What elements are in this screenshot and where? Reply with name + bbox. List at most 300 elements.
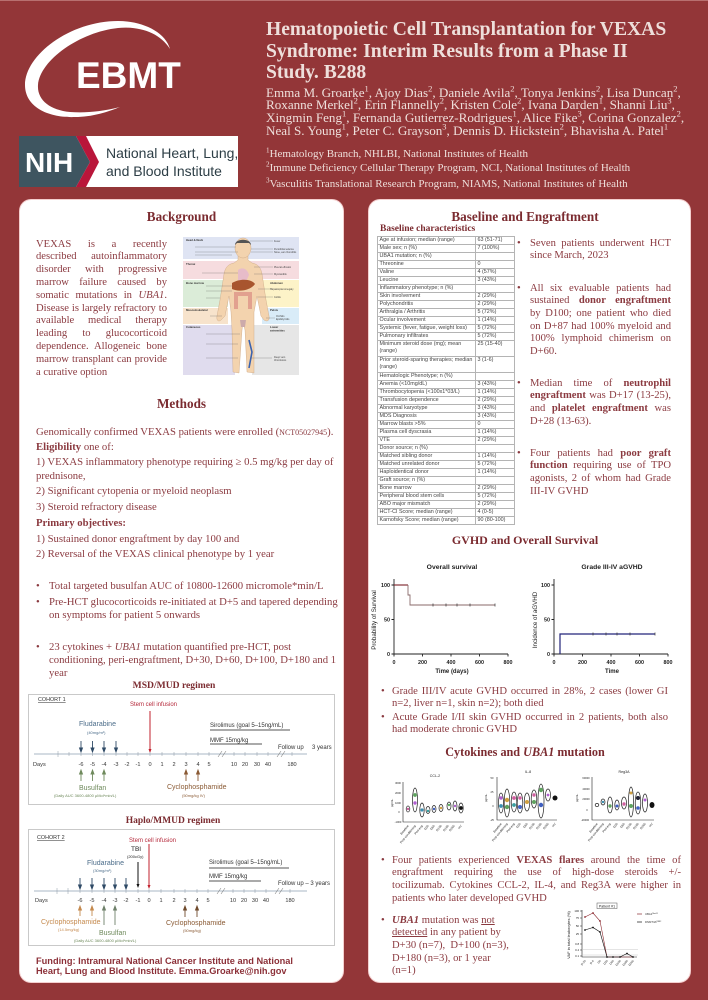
table: baseline characteristics: Thrombocytopenia (<100x1*03/L) bbox=[380, 389, 460, 395]
diagram: cohort 2 timeline: 2 bbox=[172, 898, 176, 904]
chart: UBA1 VAF over time, patient 1: D-20 bbox=[580, 959, 587, 966]
diagram: cohort 2 timeline: (14.5mg/kg) bbox=[58, 927, 80, 932]
diagram: cohort 1 timeline: Cyclophosphamide bbox=[167, 784, 227, 791]
authors: Neal S. Young1, Peter C. Grayson3, Dennis D. Hickstein2, Bhavisha A. Patel1 bbox=[266, 121, 668, 138]
bullet: UBA1 mutation not detected: detected in any patient by bbox=[392, 927, 501, 938]
bullet: donor engraftment bbox=[517, 283, 671, 357]
figure: VEXAS clinical manifestations anatomy: Myocarditis bbox=[274, 273, 287, 276]
chart: grade III-IV aGVHD incidence: 50 bbox=[544, 618, 550, 624]
bullet: VEXAS flares: Four patients experienced VEXAS flares around the time of bbox=[392, 855, 681, 866]
diagram: cohort 2 timeline: MMF 15mg/kg bbox=[209, 874, 247, 880]
heading: Methods: Methods bbox=[157, 396, 206, 411]
table: baseline characteristics: Prior steroid-sparing therapies; median bbox=[380, 357, 472, 363]
diagram: cohort 2 timeline: Stem cell infusion bbox=[129, 838, 176, 844]
figure: VEXAS clinical manifestations anatomy: Colitis bbox=[274, 296, 282, 299]
table: baseline characteristics: 3 (43%) bbox=[478, 381, 496, 387]
diagram: cohort 1 timeline: Stem cell infusion bbox=[130, 702, 177, 708]
diagram: cohort 2 timeline: -6 bbox=[78, 898, 82, 904]
diagram: cohort 2 timeline: (200cGy) bbox=[127, 854, 144, 859]
chart: UBA1 VAF over time, patient 1: D180 bbox=[621, 959, 629, 967]
table: baseline characteristics: 5 (72%) bbox=[478, 309, 496, 315]
table: baseline characteristics: Threonine bbox=[380, 261, 404, 267]
diagram: cohort 1 timeline: 180 bbox=[287, 762, 297, 768]
figure: VEXAS clinical manifestations anatomy: Thorax bbox=[186, 262, 196, 266]
affiliations: 2Immune Deficiency Cellular Therapy Program, NCI, National Institutes of Health bbox=[266, 160, 630, 174]
chart: grade III-IV aGVHD incidence: 400 bbox=[606, 660, 616, 666]
bullet: acute skin GVHD: had moderate chronic GVHD bbox=[392, 724, 517, 735]
chart: CCL-2 bbox=[390, 774, 464, 844]
authors: Roxanne Merkel2, Erin Flannelly2, Kristen Cole2, Ivana Darden1, Shanni Liu3, bbox=[266, 96, 675, 112]
table: baseline characteristics: 25 (15-40) bbox=[478, 341, 502, 347]
chart: grade III-IV aGVHD incidence: 0 bbox=[547, 652, 550, 658]
chart: IL-8: Post-conditioning bbox=[491, 822, 509, 842]
figure: VEXAS clinical manifestations anatomy: Musculoskeletal bbox=[186, 308, 208, 312]
table: baseline characteristics: Transfusion dependence bbox=[380, 397, 439, 403]
table: baseline characteristics: ABO major mismatch bbox=[380, 501, 430, 507]
diagram: cohort 2 timeline: 1 bbox=[159, 898, 163, 904]
bullet: VEXAS flares: patients who later developed GVHD bbox=[392, 893, 547, 904]
table: baseline characteristics: Plasma cell dyscrasia bbox=[380, 429, 431, 435]
table: baseline characteristics: Polychondritis bbox=[380, 301, 413, 307]
header band bbox=[0, 0, 708, 197]
title: Study. B288 bbox=[266, 62, 366, 83]
chart: Reg3A bbox=[575, 770, 654, 842]
chart: UBA1 VAF over time, patient 1: R882 bbox=[656, 921, 662, 923]
bullet: poor graft function: agonists, 2 of whom had Grade bbox=[530, 473, 671, 484]
text: eligibility and primary objectives: Genomically confirmed VEXAS patients were enrolled (NCT05027945). bbox=[36, 426, 333, 438]
bullet: VEXAS flares bbox=[381, 855, 682, 904]
diagram: cohort 2 timeline: 0 bbox=[147, 898, 151, 904]
diagram: cohort 1 timeline bbox=[28, 694, 335, 805]
diagram: cohort 2 timeline: -2 bbox=[124, 898, 128, 904]
chart: IL-8: Peri-eng bbox=[505, 822, 516, 833]
table: baseline characteristics: Leucine bbox=[380, 277, 398, 283]
bullet: donor engraftment: on D+87 had 100% myeloid and bbox=[530, 321, 671, 332]
diagram: cohort 2 timeline: Fludarabine bbox=[87, 860, 124, 867]
chart: IL-8: D30 bbox=[515, 822, 522, 829]
chart: IL-8: HV bbox=[551, 822, 557, 828]
text: background paragraph: disorder with progressive bbox=[36, 264, 167, 275]
table: baseline characteristics: Anemia (<10mg/dL) bbox=[380, 381, 427, 387]
diagram: cohort 1 timeline: COHORT 1 bbox=[38, 697, 66, 703]
diagram: cohort 1 timeline: -2 bbox=[125, 762, 129, 768]
chart: overall survival: 0 bbox=[392, 660, 396, 666]
chart: grade III-IV aGVHD incidence: 100 bbox=[541, 583, 550, 589]
text: background paragraph: described autoinflammatory bbox=[36, 251, 167, 262]
diagram: cohort 2 timeline: 20 bbox=[241, 898, 247, 904]
table: baseline characteristics: Graft source; n (%) bbox=[380, 477, 425, 483]
bullets: cytokines and UBA1 quantification: conditioning, peri-engraftment, D+30, D+60, D+100, D+180 and 1 bbox=[49, 654, 336, 666]
logo: NIH National Heart, Lung, and Blood Institute: and Blood Institute bbox=[106, 163, 222, 179]
chart: CCL-2: D60 bbox=[429, 824, 436, 831]
chart: CCL-2: D30 bbox=[423, 824, 430, 831]
heading: Background: Background bbox=[147, 209, 216, 224]
diagram: cohort 1 timeline: -5 bbox=[90, 762, 95, 768]
chart: IL-8: pg/mL bbox=[484, 794, 488, 802]
chart: UBA1 VAF over time, patient 1: 0.4 bbox=[575, 948, 579, 952]
figure: VEXAS clinical manifestations anatomy: Orchitis bbox=[276, 315, 285, 318]
chart: Reg3A: D60 bbox=[619, 822, 626, 829]
authors: Xingmin Feng1, Fernanda Gutierrez-Rodrigues1, Alice Fike3, Corina Gonzalez2, bbox=[266, 109, 684, 125]
bullets: conditioning and steroids: • bbox=[36, 580, 40, 592]
heading: MSD/MUD regimen: MSD/MUD regimen bbox=[133, 680, 215, 691]
table: baseline characteristics: Arthralgia / Arthritis bbox=[380, 309, 425, 315]
bullets: conditioning and steroids bbox=[36, 580, 338, 621]
table: baseline characteristics: Marrow blasts >5% bbox=[380, 421, 426, 427]
chart: Reg3A: HV bbox=[648, 822, 654, 828]
table: baseline characteristics: Matched unrelated donor bbox=[380, 461, 439, 467]
chart: CCL-2: 1000 bbox=[395, 801, 401, 805]
chart: UBA1 VAF over time, patient 1: Patient #1 bbox=[599, 904, 615, 908]
diagram: cohort 1 timeline: 4 bbox=[196, 762, 200, 768]
diagram: cohort 2 timeline: Cyclophosphamide bbox=[41, 919, 101, 926]
bullet: poor graft function: function requiring use of TPO bbox=[530, 460, 671, 471]
bullet: poor graft function: • bbox=[517, 448, 521, 459]
diagram: cohort 1 timeline: Follow up bbox=[278, 745, 304, 751]
diagram: cohort 1 timeline: Sirolimus (goal 5–15ng/mL) bbox=[210, 723, 283, 729]
text: eligibility and primary objectives: 1) VEXAS inflammatory phenotype requiring ≥ 0.5 mg/kg per day of bbox=[36, 456, 333, 468]
chart: overall survival: Probability of Survival bbox=[371, 590, 378, 650]
chart: UBA1 VAF over time, patient 1: 0.8 bbox=[575, 942, 579, 946]
chart: IL-8: 25 bbox=[491, 790, 494, 794]
heading: Baseline characteristics: Baseline characteristics bbox=[380, 224, 475, 234]
bullet: acute GVHD grade III/IV: • bbox=[381, 686, 385, 697]
logo: NIH National Heart, Lung, and Blood Institute: National Heart, Lung, bbox=[106, 145, 238, 161]
authors bbox=[266, 83, 684, 138]
chart: overall survival: Overall survival bbox=[427, 564, 477, 571]
bullet: acute GVHD grade III/IV: Grade III/IV acute GVHD occurred in 28%, 2 cases (lower GI bbox=[392, 686, 668, 697]
chart: CCL-2: Post-conditioning bbox=[399, 824, 417, 844]
figure: VEXAS clinical manifestations anatomy: Bone marrow bbox=[186, 281, 205, 285]
figure: VEXAS clinical manifestations anatomy: Cutaneous bbox=[186, 325, 201, 329]
funding statement: Funding: Intramural National Cancer Institute and National bbox=[36, 956, 293, 966]
bullet: donor engraftment: All six evaluable patients had bbox=[530, 283, 671, 294]
bullet: acute GVHD grade III/IV bbox=[381, 686, 668, 709]
diagram: cohort 1 timeline: Busulfan bbox=[79, 785, 106, 792]
chart: Reg3A: 20000 bbox=[582, 797, 590, 801]
chart: grade III-IV aGVHD incidence: Grade III-IV aGVHD bbox=[581, 564, 643, 571]
figure: VEXAS clinical manifestations anatomy: Epididymitis bbox=[276, 318, 290, 321]
table: baseline characteristics: Minimum steroid dose (mg); mean bbox=[380, 341, 461, 347]
diagram: cohort 1 timeline: (50mg/kg IV) bbox=[182, 793, 206, 798]
table: baseline characteristics: (range) bbox=[380, 364, 397, 370]
chart: overall survival: 400 bbox=[446, 660, 456, 666]
text: background paragraph: dependence. Allogeneic bone bbox=[36, 341, 167, 352]
figure: VEXAS clinical manifestations anatomy: Deep vein bbox=[274, 356, 286, 359]
diagram: cohort 1 timeline: 10 bbox=[231, 762, 237, 768]
table: baseline characteristics: Age at infusion; median (range) bbox=[380, 237, 455, 243]
chart: CCL-2: 0 bbox=[398, 810, 400, 814]
text: background paragraph: marrow transplant can provide bbox=[36, 354, 167, 365]
table: baseline characteristics: 5 (72%) bbox=[478, 493, 496, 499]
logo: NIH National Heart, Lung, and Blood Institute bbox=[19, 136, 238, 187]
text: eligibility and primary objectives: Primary objectives: bbox=[36, 517, 126, 529]
text: background paragraph: somatic mutations in UBA1. bbox=[36, 290, 167, 301]
diagram: cohort 2 timeline: Busulfan bbox=[99, 930, 126, 937]
bullet: patients underwent HCT: since March, 2023 bbox=[530, 250, 609, 261]
chart: overall survival: Time (days) bbox=[435, 669, 469, 675]
chart: Reg3A: -20000 bbox=[581, 818, 590, 822]
table: baseline characteristics: Skin involvement bbox=[380, 293, 420, 299]
figure: VEXAS clinical manifestations anatomy: Lower bbox=[270, 325, 279, 329]
table: baseline characteristics: 7 (100%) bbox=[478, 245, 499, 251]
heading: Haplo/MMUD regimen: Haplo/MMUD regimen bbox=[126, 816, 220, 826]
diagram: cohort 2 timeline: Days bbox=[35, 898, 48, 904]
diagram: cohort 2 timeline: (Daily AUC 3600-4800 µMol*min/L) bbox=[74, 938, 137, 943]
diagram: cohort 1 timeline: (40mg/m²) bbox=[87, 730, 106, 735]
bullet: UBA1 mutation not detected: UBA1 mutation was not bbox=[392, 915, 495, 926]
table: baseline characteristics: 3 (43%) bbox=[478, 413, 496, 419]
text: background paragraph: marrow failure caused by bbox=[36, 277, 167, 288]
figure: VEXAS clinical manifestations anatomy: Periorbital edema bbox=[274, 248, 294, 251]
chart: UBA1 VAF over time, patient 1: D365 bbox=[627, 959, 635, 967]
table: baseline characteristics bbox=[377, 236, 515, 525]
chart: grade III-IV aGVHD incidence: 800 bbox=[664, 660, 672, 666]
table: baseline characteristics: 63 (51-71) bbox=[478, 237, 502, 243]
bullet: VEXAS flares: tocilizumab. Cytokines CCL-2, IL-4, and Reg3A were higher in bbox=[392, 880, 681, 891]
table: baseline characteristics: 1 (14%) bbox=[478, 317, 496, 323]
figure: VEXAS clinical manifestations anatomy: Nose, ear chondritis bbox=[274, 251, 297, 254]
text: eligibility and primary objectives: Eligibility one of: bbox=[36, 441, 114, 453]
chart: IL-8 bbox=[484, 770, 558, 842]
table: baseline characteristics: Donor source; n (%) bbox=[380, 445, 428, 451]
figure: VEXAS clinical manifestations anatomy: Hepatosplenomegaly bbox=[270, 288, 294, 291]
text: eligibility and primary objectives: 3) Steroid refractory disease bbox=[36, 501, 157, 513]
chart: overall survival: 100 bbox=[381, 583, 390, 589]
bullet: neutrophil and platelet engraftment: and platelet engraftment was bbox=[530, 403, 671, 414]
table: baseline characteristics: Hematologic Phenotype; n (%) bbox=[380, 373, 453, 379]
bullet: patients underwent HCT: Seven patients underwent HCT bbox=[530, 238, 671, 249]
diagram: cohort 2 timeline: (30mg/m²) bbox=[93, 868, 112, 873]
chart: IL-8: Baseline bbox=[492, 822, 503, 833]
bullets: cytokines and UBA1 quantification: 23 cytokines + UBA1 mutation quantified pre-HCT, post bbox=[49, 641, 291, 653]
diagram: cohort 2 timeline: 40 bbox=[263, 898, 269, 904]
diagram: cohort 2 timeline: 180 bbox=[285, 898, 295, 904]
bullet: UBA1 mutation not detected: D+30 (n=7), D+100 (n=3), bbox=[392, 940, 509, 951]
bullet: neutrophil and platelet engraftment: • bbox=[517, 378, 521, 389]
diagram: cohort 1 timeline: 0 bbox=[148, 762, 152, 768]
panel: results bbox=[369, 200, 690, 982]
table: baseline characteristics: Karnofsky Score; median (range) bbox=[380, 517, 459, 523]
bullet: donor engraftment: • bbox=[517, 283, 521, 294]
bullets: conditioning and steroids: Pre-HCT glucocorticoids re-initiated at D+5 and tapered depending bbox=[49, 596, 338, 608]
table: baseline characteristics: HCT-CI Score; median (range) bbox=[380, 509, 453, 515]
bullet: neutrophil and platelet engraftment bbox=[517, 378, 671, 427]
panel: background, methods and regimens bbox=[20, 200, 343, 982]
diagram: cohort 2 timeline: COHORT 2 bbox=[37, 835, 65, 841]
logo: EBMT: EBMT bbox=[76, 55, 181, 96]
figure: VEXAS clinical manifestations anatomy: Pelvis bbox=[270, 308, 279, 312]
chart: IL-8: 50 bbox=[491, 776, 494, 780]
heading: Baseline and Engraftment: Baseline and Engraftment bbox=[451, 209, 599, 224]
text: eligibility and primary objectives bbox=[36, 426, 334, 560]
table: baseline characteristics: 1 (14%) bbox=[478, 469, 496, 475]
figure: VEXAS clinical manifestations anatomy: Abdomen bbox=[270, 281, 283, 285]
table: baseline characteristics: 3 (43%) bbox=[478, 277, 496, 283]
bullet: donor engraftment: 100% lymphoid chimerism on bbox=[530, 333, 671, 344]
table: baseline characteristics: 2 (29%) bbox=[478, 437, 496, 443]
text: background paragraph: Disease is largely refractory to bbox=[36, 303, 167, 314]
diagram: cohort 2 timeline: -5 bbox=[90, 898, 94, 904]
table: baseline characteristics: UBA1 mutation; n (%) bbox=[380, 253, 432, 259]
chart: IL-8: D180 bbox=[535, 822, 543, 830]
table: baseline characteristics: Haploidentical donor bbox=[380, 469, 429, 475]
chart: grade III-IV aGVHD incidence: 600 bbox=[635, 660, 644, 666]
table: baseline characteristics: Pulmonary infiltrates bbox=[380, 333, 428, 339]
title: Syndrome: Interim Results from a Phase II bbox=[266, 41, 628, 62]
diagram: cohort 2 timeline: 5 bbox=[206, 898, 210, 904]
chart: UBA1 VAF over time, patient 1: UBA1 bbox=[645, 912, 652, 916]
chart: IL-8: D365 bbox=[542, 822, 550, 830]
bullet: donor engraftment: sustained donor engraftment bbox=[530, 295, 671, 306]
bullet: VEXAS flares: • bbox=[381, 855, 385, 866]
chart: UBA1 VAF over time, patient 1: D-6 bbox=[589, 959, 595, 965]
chart: CCL-2: 3000 bbox=[395, 781, 401, 785]
chart: IL-8: D60 bbox=[522, 822, 529, 829]
table: baseline characteristics: 4 (0-5) bbox=[478, 509, 493, 515]
text: eligibility and primary objectives: 2) Significant cytopenia or myeloid neoplasm bbox=[36, 485, 232, 497]
chart: CCL-2: D180 bbox=[442, 824, 450, 832]
chart: UBA1 VAF over time, patient 1 bbox=[566, 902, 662, 967]
table: baseline characteristics: 1 (14%) bbox=[478, 429, 496, 435]
chart: IL-8: -25 bbox=[490, 818, 494, 822]
affiliations: 3Vasculitis Translational Research Program, NIAMS, National Institutes of Health bbox=[266, 176, 628, 190]
table: baseline characteristics: Male sex; n (%) bbox=[380, 245, 417, 251]
bullet: UBA1 mutation not detected: D+180 (n=3), or 1 year bbox=[392, 953, 491, 964]
diagram: cohort 1 timeline: 5 bbox=[207, 762, 211, 768]
bullet: UBA1 mutation not detected: (n=1) bbox=[392, 965, 416, 976]
diagram: cohort 1 timeline: 20 bbox=[242, 762, 248, 768]
table: baseline characteristics: VTE bbox=[380, 437, 390, 443]
diagram: cohort 2 timeline: Cyclophosphamide bbox=[166, 920, 226, 927]
diagram: cohort 1 timeline: 3 years bbox=[312, 745, 332, 751]
chart: overall survival: 0 bbox=[387, 652, 390, 658]
chart: UBA1 VAF over time, patient 1: D0 bbox=[596, 959, 602, 964]
table: baseline characteristics: 4 (57%) bbox=[478, 269, 496, 275]
funding statement: Heart, Lung and Blood Institute. Emma.Groarke@nih.gov bbox=[36, 966, 287, 976]
table: baseline characteristics: 0 bbox=[478, 261, 480, 267]
diagram: cohort 1 timeline: 3 bbox=[184, 762, 188, 768]
bullets: conditioning and steroids: • bbox=[36, 596, 40, 608]
diagram: cohort 2 timeline: 30 bbox=[252, 898, 258, 904]
chart: Reg3A: D100 bbox=[625, 822, 633, 830]
chart: Reg3A: Baseline bbox=[588, 822, 599, 833]
bullet: UBA1 mutation not detected bbox=[381, 915, 509, 976]
diagram: cohort 1 timeline: -1 bbox=[136, 762, 140, 768]
diagram: cohort 2 timeline: 3 bbox=[183, 898, 187, 904]
chart: CCL-2: -1000 bbox=[395, 820, 402, 824]
chart: grade III-IV aGVHD incidence: 0 bbox=[552, 660, 556, 666]
bullet: acute skin GVHD: • bbox=[381, 712, 385, 723]
diagram: cohort 1 timeline: (Daily AUC 3600-4800 µMol*min/L) bbox=[54, 793, 117, 798]
table: baseline characteristics: 90 (80-100) bbox=[478, 517, 505, 523]
diagram: cohort 2 timeline: -1 bbox=[136, 898, 140, 904]
chart: CCL-2: Peri-eng bbox=[413, 824, 424, 835]
table: baseline characteristics: Inflammatory phenotype; n (%) bbox=[380, 285, 453, 291]
heading: GVHD and Overall Survival: GVHD and Overall Survival bbox=[452, 533, 598, 547]
chart: UBA1 VAF over time, patient 1: D60 bbox=[608, 959, 615, 966]
chart: Reg3A: D365 bbox=[639, 822, 647, 830]
chart: UBA1 VAF over time, patient 1: 0.1 bbox=[575, 954, 579, 958]
chart: CCL-2: D365 bbox=[448, 824, 456, 832]
title bbox=[266, 19, 666, 83]
table: baseline characteristics: Systemic (fever, fatigue, weight loss) bbox=[380, 325, 467, 331]
table: baseline characteristics: 2 (29%) bbox=[478, 501, 496, 507]
heading: Cytokines and UBA1 mutation: Cytokines and UBA1 mutation bbox=[445, 745, 605, 759]
chart: CCL-2: pg/mL bbox=[390, 799, 394, 807]
chart: Reg3A: D180 bbox=[632, 822, 640, 830]
chart: CCL-2: 2000 bbox=[395, 791, 401, 795]
chart: CCL-2: HV bbox=[457, 824, 463, 830]
table: baseline characteristics: 2 (29%) bbox=[478, 293, 496, 299]
bullet: neutrophil and platelet engraftment: D+28 (13-63). bbox=[530, 416, 591, 427]
chart: overall survival: 600 bbox=[475, 660, 484, 666]
chart: UBA1 VAF over time, patient 1: Met41 bbox=[652, 912, 659, 915]
chart: Reg3A: Post-conditioning bbox=[587, 822, 605, 842]
bullet: donor engraftment: by D100; one patient who died bbox=[530, 308, 671, 319]
text: background paragraph: leading to glucocorticoid bbox=[36, 328, 167, 339]
title: Hematopoietic Cell Transplantation for VEXAS bbox=[266, 19, 666, 40]
chart: CCL-2: D100 bbox=[435, 824, 443, 832]
table: baseline characteristics: 2 (29%) bbox=[478, 397, 496, 403]
chart: IL-8: IL-8 bbox=[525, 770, 531, 774]
bullets: conditioning and steroids: Total targeted busulfan AUC of 10800-12600 micromole*min/L bbox=[49, 580, 324, 592]
chart: overall survival bbox=[371, 564, 512, 675]
chart: UBA1 VAF over time, patient 1: 100 bbox=[574, 909, 579, 913]
diagram: cohort 2 timeline: (50mg/kg) bbox=[183, 928, 202, 933]
figure: VEXAS clinical manifestations anatomy: Pleural effusion bbox=[274, 266, 292, 269]
chart: UBA1 VAF over time, patient 1: 50 bbox=[576, 924, 579, 928]
bullet: donor engraftment: D+60. bbox=[530, 346, 557, 357]
chart: Reg3A: Peri-eng bbox=[601, 822, 612, 833]
diagram: cohort 1 timeline: -4 bbox=[102, 762, 106, 768]
bullets: cytokines and UBA1 quantification: year bbox=[49, 667, 67, 679]
diagram: cohort 2 timeline: 4 bbox=[195, 898, 199, 904]
bullet: acute GVHD grade III/IV: n=2, liver n=1, skin n=2); both died bbox=[392, 698, 544, 709]
table: baseline characteristics: 3 (1-6) bbox=[478, 357, 493, 363]
chart: overall survival: 200 bbox=[418, 660, 427, 666]
table: baseline characteristics: Peripheral blood stem cells bbox=[380, 493, 444, 499]
chart: UBA1 VAF over time, patient 1: D30 bbox=[602, 959, 609, 966]
text: background paragraph: VEXAS is a recently bbox=[36, 239, 167, 250]
figure: VEXAS clinical manifestations anatomy: thrombosis bbox=[274, 359, 287, 362]
diagram: cohort 2 timeline: TBI bbox=[131, 846, 141, 853]
chart: IL-8: D100 bbox=[528, 822, 536, 830]
chart: IL-8: 0 bbox=[492, 804, 494, 808]
funding statement bbox=[36, 956, 293, 976]
diagram: cohort 2 timeline: -3 bbox=[113, 898, 117, 904]
table: baseline characteristics: 5 (72%) bbox=[478, 333, 496, 339]
diagram: cohort 1 timeline: Fludarabine bbox=[79, 721, 116, 728]
chart: Reg3A: 60000 bbox=[582, 776, 590, 780]
chart: overall survival: 50 bbox=[384, 618, 390, 624]
diagram: cohort 1 timeline: -3 bbox=[114, 762, 118, 768]
bullet: neutrophil and platelet engraftment: Median time of neutrophil bbox=[530, 378, 671, 389]
authors: Emma M. Groarke1, Ajoy Dias2, Daniele Avila2, Tonya Jenkins2, Lisa Duncan2, bbox=[266, 83, 681, 100]
chart: UBA1 VAF over time, patient 1: DNMT3A bbox=[645, 920, 656, 924]
table: baseline characteristics: 0 bbox=[478, 421, 480, 427]
charts: survival and aGVHD curves bbox=[371, 564, 672, 675]
chart: UBA1 VAF over time, patient 1: 25 bbox=[576, 932, 579, 936]
bullets: conditioning and steroids: on symptoms for patient 5 onwards bbox=[49, 609, 200, 621]
table: baseline characteristics: 5 (72%) bbox=[478, 325, 496, 331]
bullet: UBA1 mutation not detected: • bbox=[381, 915, 385, 926]
text: eligibility and primary objectives: 2) Reversal of the VEXAS clinical phenotype by 1 year bbox=[36, 548, 274, 560]
text: background paragraph: available medical therapy bbox=[36, 315, 167, 326]
chart: grade III-IV aGVHD incidence bbox=[532, 564, 672, 675]
diagram: cohort 2 timeline: -4 bbox=[102, 898, 106, 904]
chart: Reg3A: pg/mL bbox=[575, 794, 579, 802]
